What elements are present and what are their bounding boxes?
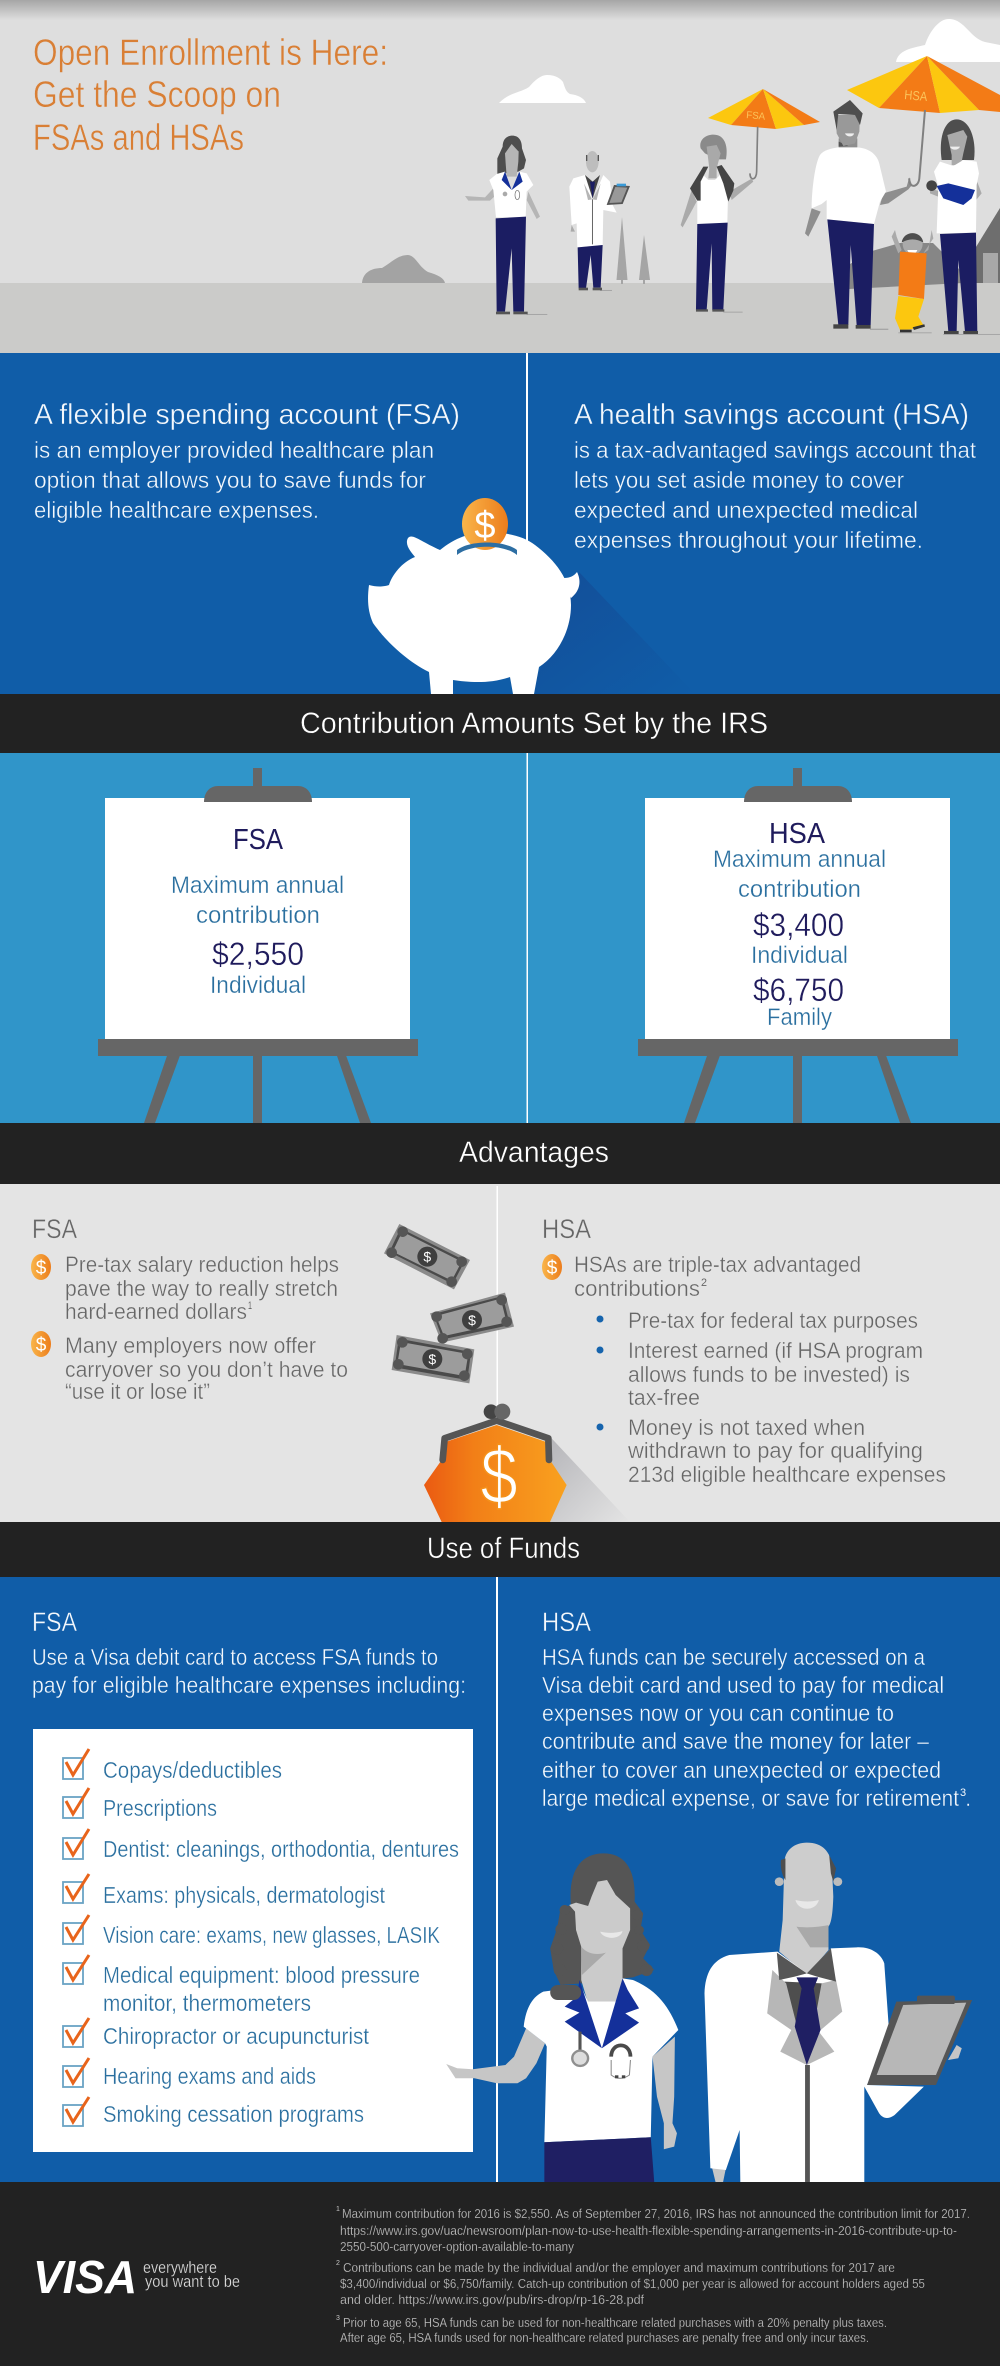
text block: FSA definition: A flexible spending account (FSA) xyxy=(34,399,460,431)
panel: eligible expenses checklist: Chiropractor or acupuncturist xyxy=(103,2023,370,2049)
text block: HSA advantages xyxy=(542,1214,946,1487)
icon: piggy bank with coin: $ xyxy=(474,505,496,547)
icon: piggy bank with coin xyxy=(368,498,695,694)
text block: footnotes xyxy=(336,2206,970,2345)
panel: eligible expenses checklist: Dentist: cleanings, orthodontia, dentures xyxy=(103,1836,459,1862)
figure: female doctor small xyxy=(465,136,547,315)
figure: woman with FSA umbrella: FSA xyxy=(746,110,766,123)
text block: FSA advantages: 1 xyxy=(248,1300,252,1312)
icon: coin bullet xyxy=(542,1254,562,1280)
text block: HSA use: expenses now or you can continue to xyxy=(542,1700,894,1726)
text block: FSA advantages: Pre-tax salary reduction helps xyxy=(65,1252,339,1277)
text block: HSA use: large medical expense, or save for retirement xyxy=(542,1785,960,1811)
logo: Visa xyxy=(33,2251,240,2303)
text block: HSA use: HSA funds can be securely accessed on a xyxy=(542,1644,925,1670)
title: Get the Scoop on xyxy=(33,74,281,115)
text block: footnotes: 1 xyxy=(336,2206,340,2213)
text block: footnotes: Contributions can be made by the individual and/or the employer and maximum contributions for 2017 are xyxy=(343,2260,895,2275)
text block: HSA use: . xyxy=(965,1785,971,1811)
text block: HSA advantages: Interest earned (if HSA program xyxy=(628,1338,923,1363)
panel: eligible expenses checklist: monitor, thermometers xyxy=(103,1990,311,2016)
title: Open Enrollment is Here: xyxy=(33,32,388,73)
title xyxy=(33,32,388,158)
header background xyxy=(0,0,1000,353)
text block: FSA advantages: pave the way to really stretch xyxy=(65,1276,338,1301)
text block: footnotes: Prior to age 65, HSA funds can be used for non-healthcare related purchases with a 20% penalty plus taxes. xyxy=(343,2315,887,2330)
easel: FSA xyxy=(98,768,418,1123)
text block: HSA use: HSA xyxy=(542,1607,591,1637)
text block: FSA definition: eligible healthcare expenses. xyxy=(34,497,319,523)
figure: male doctor small xyxy=(569,151,630,291)
icon: orange coin purse: $ xyxy=(480,1431,518,1520)
text block: HSA definition xyxy=(574,399,977,553)
panel: contribution amounts xyxy=(0,753,1000,1123)
text block: footnotes: and older. https://www.irs.gov/pub/irs-drop/rp-16-28.pdf xyxy=(340,2292,644,2307)
text block: FSA advantages: hard-earned dollars xyxy=(65,1299,247,1324)
text block: HSA definition: A health savings account (HSA) xyxy=(574,399,969,431)
text block: HSA definition: expenses throughout your lifetime. xyxy=(574,527,923,553)
band heading: use of funds: Use of Funds xyxy=(427,1532,580,1565)
text block: HSA advantages: 213d eligible healthcare expenses xyxy=(628,1462,946,1487)
easel: HSA: Maximum annual xyxy=(713,846,886,873)
text block: HSA advantages: contributions xyxy=(574,1276,700,1301)
band heading: use of funds xyxy=(0,1522,1000,1577)
text block: footnotes: After age 65, HSA funds used for non-healthcare related purchases are penalty free and only incur taxes. xyxy=(340,2330,869,2345)
text block: FSA use: Use a Visa debit card to access FSA funds to xyxy=(32,1644,438,1670)
text block: HSA advantages: HSA xyxy=(542,1214,591,1244)
icon: orange coin purse xyxy=(424,1404,630,1522)
text block: HSA use: Visa debit card and used to pay for medical xyxy=(542,1672,944,1698)
figure: large male doctor xyxy=(704,1843,972,2182)
panel: eligible expenses checklist: Prescriptions xyxy=(103,1795,217,1821)
easel: HSA: $6,750 xyxy=(753,972,844,1008)
text block: footnotes: 2 xyxy=(336,2260,340,2267)
text block: HSA advantages: Pre-tax for federal tax purposes xyxy=(628,1308,918,1333)
easel: HSA: HSA xyxy=(769,818,826,850)
text block: HSA use: either to cover an unexpected or expected xyxy=(542,1757,941,1783)
text block: HSA use: 3 xyxy=(960,1787,966,1799)
text block: HSA advantages: allows funds to be invested) is xyxy=(628,1362,910,1387)
band heading: contribution amounts xyxy=(0,694,1000,754)
text block: footnotes: 3 xyxy=(336,2315,340,2322)
panel: eligible expenses checklist: Medical equipment: blood pressure xyxy=(103,1962,420,1988)
easel: FSA: Individual xyxy=(210,972,306,999)
panel: advantages xyxy=(0,1184,1000,1522)
easel: FSA: FSA xyxy=(233,824,284,856)
logo: Visa: everywhere xyxy=(143,2258,217,2277)
icon: falling dollar bills: $ xyxy=(468,1312,476,1328)
footer xyxy=(0,2182,1000,2366)
text block: HSA use: contribute and save the money for later – xyxy=(542,1728,929,1754)
band heading: contribution amounts: Contribution Amounts Set by the IRS xyxy=(300,707,768,740)
easel: HSA xyxy=(638,768,958,1123)
text block: HSA definition: expected and unexpected medical xyxy=(574,497,918,523)
man xyxy=(805,208,821,237)
text block: HSA advantages: 2 xyxy=(701,1277,707,1289)
logo: Visa: VISA xyxy=(33,2251,137,2303)
band heading: advantages: Advantages xyxy=(459,1136,609,1169)
woman xyxy=(941,119,975,160)
text block: FSA use: FSA xyxy=(32,1607,77,1637)
icon: falling dollar bills xyxy=(384,1224,514,1383)
text block: HSA definition: lets you set aside money to cover xyxy=(574,467,904,493)
text block: HSA definition: is a tax-advantaged savings account that xyxy=(574,437,977,463)
band heading: advantages xyxy=(0,1123,1000,1184)
figure: woman with FSA umbrella xyxy=(681,89,820,313)
icon: clouds and hill scenery xyxy=(362,19,1000,289)
icon: coin bullet xyxy=(31,1254,51,1280)
easel: HSA: Family xyxy=(767,1004,832,1031)
easel: FSA: Maximum annual xyxy=(171,872,344,899)
easel: HSA: contribution xyxy=(738,876,861,903)
text block: FSA use: pay for eligible healthcare expenses including: xyxy=(32,1672,466,1698)
easel: FSA: contribution xyxy=(196,902,320,929)
figure: large female doctor xyxy=(446,1853,678,2182)
panel: eligible expenses checklist: Vision care: exams, new glasses, LASIK xyxy=(103,1922,441,1948)
panel: eligible expenses checklist: Exams: physicals, dermatologist xyxy=(103,1882,386,1908)
text block: FSA advantages: “use it or lose it” xyxy=(65,1379,210,1404)
panel: use of funds xyxy=(0,1577,1000,2182)
icon: coin bullet: $ xyxy=(36,1335,47,1356)
text block: FSA advantages: Many employers now offer xyxy=(65,1333,316,1358)
panel: eligible expenses checklist: Copays/deductibles xyxy=(103,1757,282,1783)
text block: FSA definition: is an employer provided healthcare plan xyxy=(34,437,434,463)
icon: coin bullet: $ xyxy=(36,1258,47,1279)
text block: FSA advantages xyxy=(31,1214,348,1404)
text block: footnotes: $3,400/individual or $6,750/family. Catch-up contribution of $1,000 per year is allowed for account holders aged 55 xyxy=(340,2276,925,2291)
easel: FSA: $2,550 xyxy=(212,936,304,972)
panel: what is FSA and HSA xyxy=(0,353,1000,694)
child xyxy=(892,230,902,253)
icon: falling dollar bills: $ xyxy=(423,1249,431,1265)
panel: eligible expenses checklist: Smoking cessation programs xyxy=(103,2101,364,2127)
logo: Visa: you want to be xyxy=(145,2272,240,2291)
text block: FSA definition xyxy=(34,399,460,523)
text block: FSA definition: option that allows you to save funds for xyxy=(34,467,426,493)
text block: HSA advantages: withdrawn to pay for qualifying xyxy=(627,1438,923,1463)
title: FSAs and HSAs xyxy=(33,117,244,158)
figure: family with HSA umbrella: HSA xyxy=(904,87,928,104)
easel: HSA: $3,400 xyxy=(753,907,844,943)
text block: HSA use xyxy=(542,1607,971,1811)
text block: FSA advantages: FSA xyxy=(32,1214,77,1244)
panel: eligible expenses checklist xyxy=(33,1729,473,2152)
text block: HSA advantages: Money is not taxed when xyxy=(628,1415,865,1440)
panel: eligible expenses checklist: Hearing exams and aids xyxy=(103,2063,316,2089)
text block: HSA advantages: HSAs are triple-tax advantaged xyxy=(574,1252,861,1277)
figure: family with HSA umbrella xyxy=(805,56,1000,335)
text block: HSA advantages: tax-free xyxy=(628,1385,700,1410)
text block: FSA use xyxy=(32,1607,466,1698)
icon: falling dollar bills: $ xyxy=(428,1351,436,1367)
text block: footnotes: https://www.irs.gov/uac/newsroom/plan-now-to-use-health-flexible-spending-arrangements-in-2016-contribute-up-to- xyxy=(340,2223,957,2238)
icon: coin bullet xyxy=(31,1331,51,1357)
icon: coin bullet: $ xyxy=(547,1258,558,1279)
easel: HSA: Individual xyxy=(751,942,848,969)
umbrella handle xyxy=(909,110,925,186)
text block: footnotes: 2550-500-carryover-option-available-to-many xyxy=(340,2239,574,2254)
text block: FSA advantages: carryover so you don’t have to xyxy=(65,1357,348,1382)
